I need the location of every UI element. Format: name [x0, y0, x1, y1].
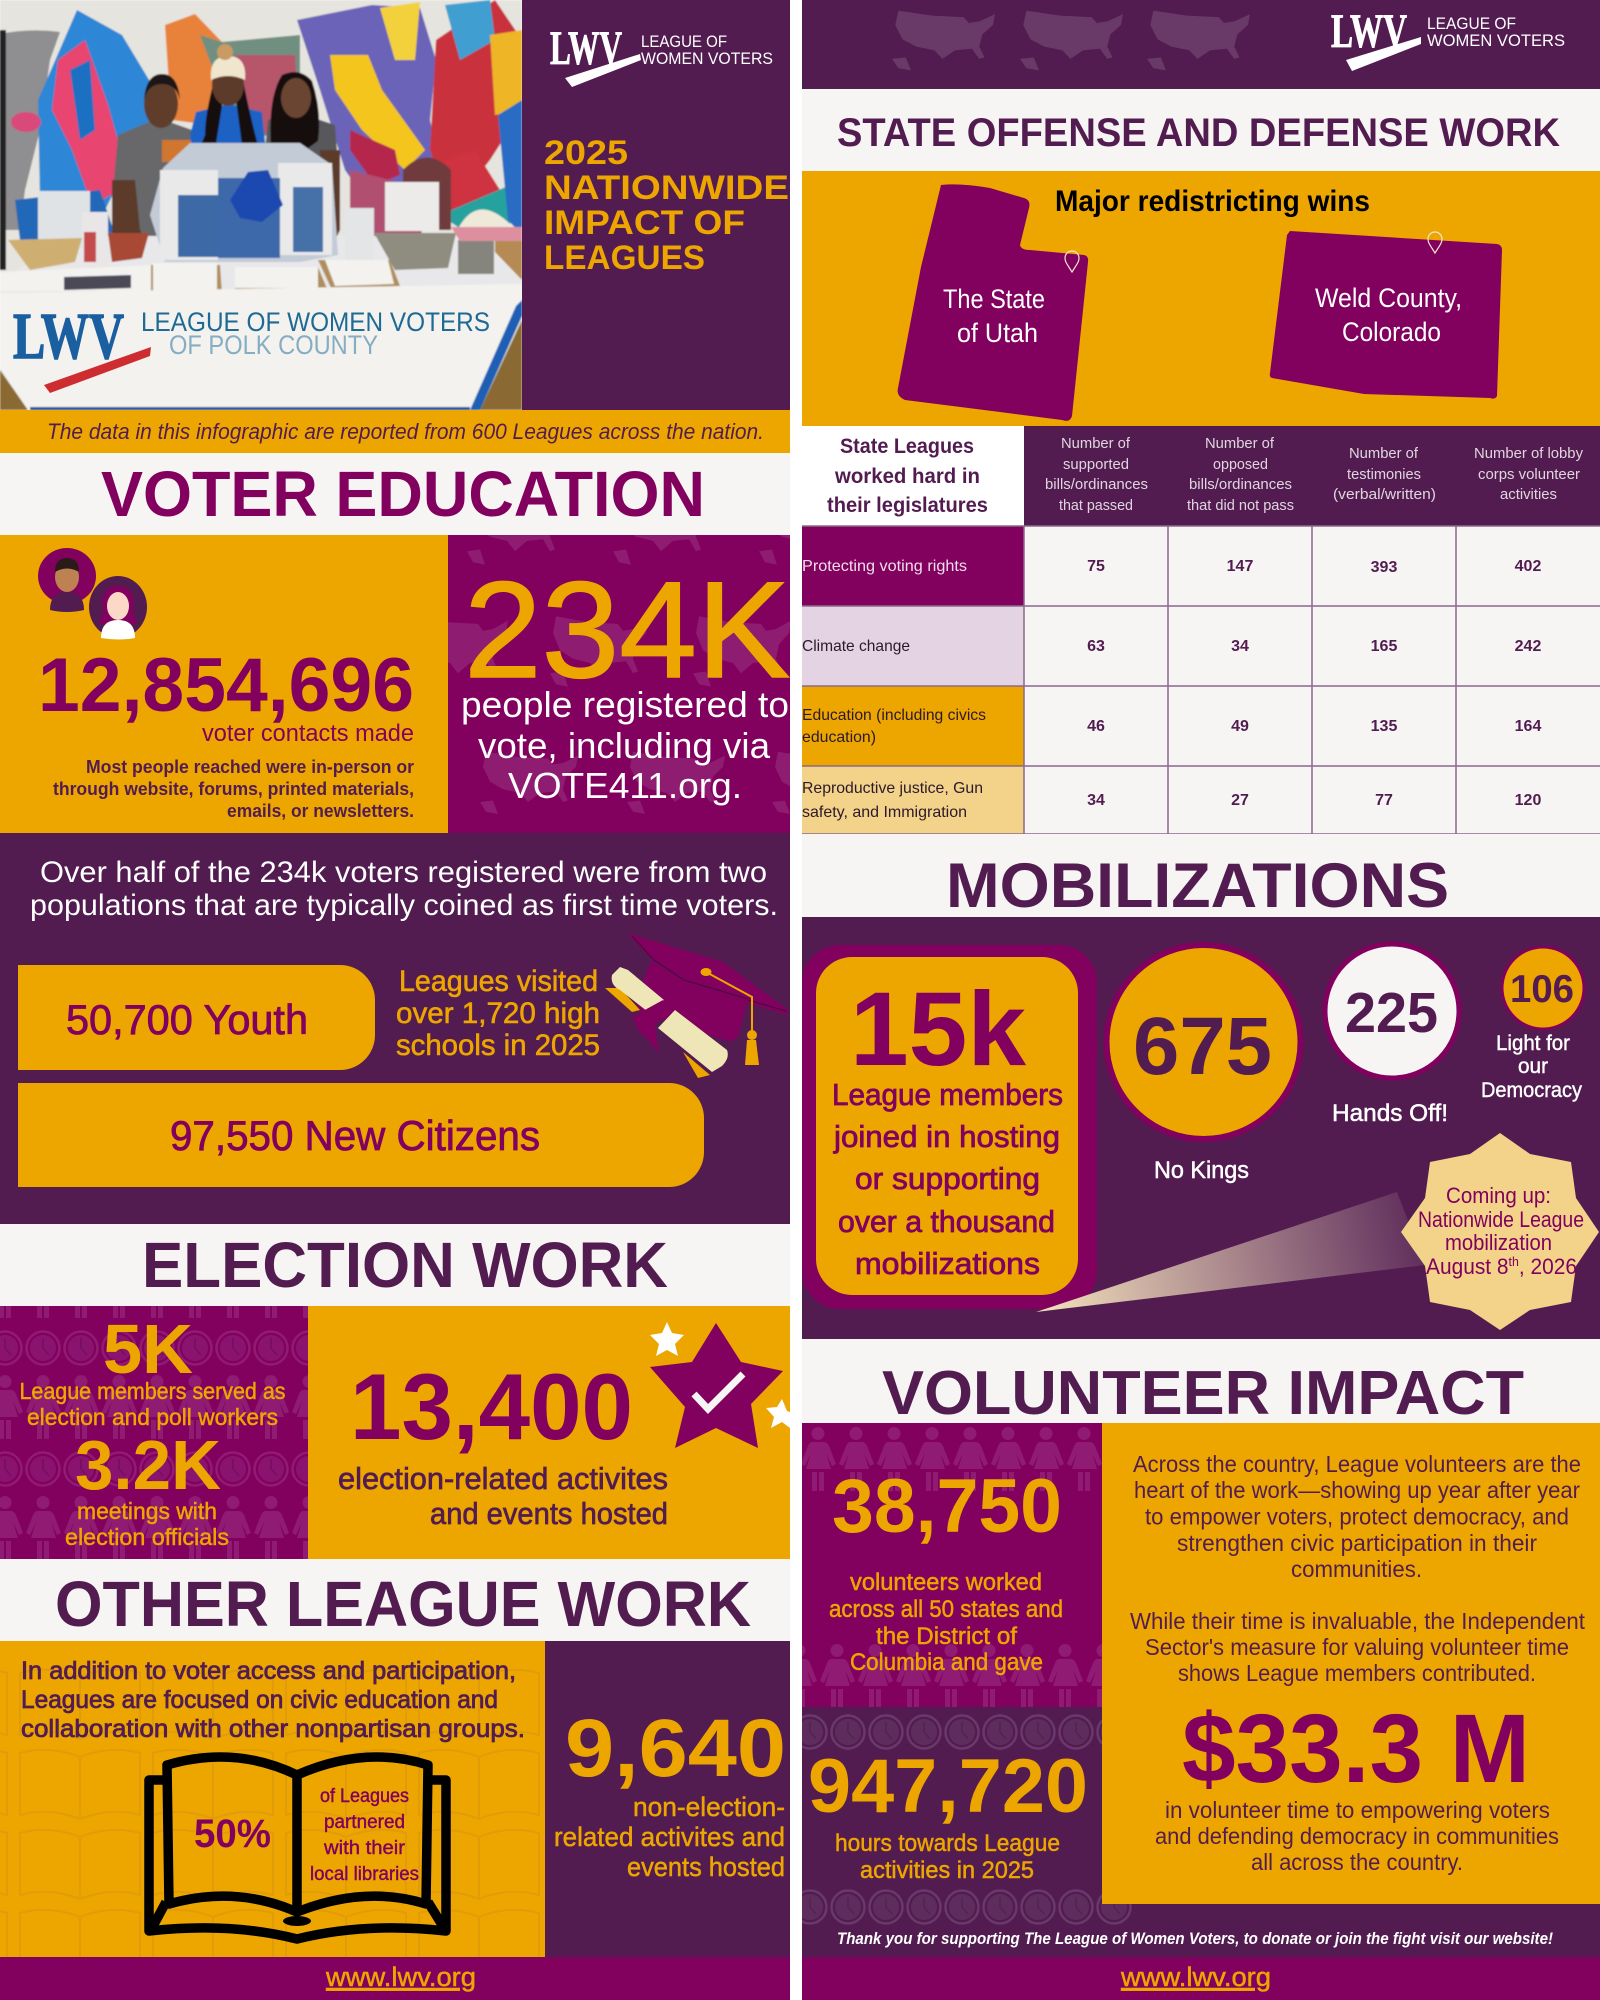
stat circle: No Kings: No Kings — [1154, 1157, 1249, 1184]
table values: 46 — [1087, 718, 1105, 735]
panel: voter contacts: 12,854,696 — [38, 643, 414, 728]
pill: new citizens — [18, 1083, 704, 1187]
data source strip — [0, 410, 790, 453]
heading: other league work: OTHER LEAGUE WORK — [55, 1568, 751, 1640]
photo: volunteers at a League table — [0, 0, 522, 410]
logo: LWV: LWV — [550, 22, 622, 75]
table values: 165 — [1371, 638, 1397, 655]
panel: volunteer value — [1102, 1423, 1600, 1904]
panel: election workers: election officials — [65, 1524, 229, 1550]
table column headers: that did not pass — [1187, 497, 1294, 514]
panel: election workers — [0, 1306, 308, 1559]
heading: volunteer impact — [802, 1339, 1600, 1428]
panel: election activities: 13,400 — [350, 1354, 633, 1459]
table row labels: safety, and Immigration — [802, 804, 967, 821]
callout: 15k members: 15k — [850, 971, 1027, 1088]
panel: election workers: 3.2K — [75, 1426, 221, 1504]
icon: open book with library statistic: partnered — [324, 1812, 405, 1833]
table values: 402 — [1515, 558, 1541, 575]
table column headers: Number of — [1205, 435, 1275, 452]
table values: 75 — [1087, 558, 1105, 575]
title text: LEAGUES — [544, 239, 705, 277]
panel: volunteers: volunteers worked — [850, 1569, 1042, 1596]
panel: volunteers: the District of — [876, 1623, 1017, 1650]
table row header title: worked hard in — [834, 465, 980, 488]
callout: 15k members: or supporting — [855, 1161, 1040, 1196]
panel: election activities — [308, 1306, 790, 1559]
table: state legislative work — [802, 426, 1600, 834]
footer: right website: www.lwv.org — [1120, 1962, 1271, 1992]
civic education text: In addition to voter access and participation, — [21, 1657, 516, 1685]
panel: non-election activities — [545, 1641, 790, 1957]
icon: open book with library statistic: with their — [323, 1838, 406, 1859]
stat circle: Light for our Democracy: 106 — [1510, 968, 1574, 1011]
arrow: beam toward coming up badge — [1036, 1192, 1425, 1312]
activities caption: and events hosted — [430, 1496, 668, 1531]
heading: election work — [0, 1224, 790, 1306]
panel: voter contacts: voter contacts made — [202, 720, 414, 747]
panel: redistricting wins: Major redistricting wins — [1055, 185, 1370, 218]
panel: election workers: meetings with — [77, 1498, 217, 1524]
logo: LWV: WOMEN VOTERS — [1427, 31, 1565, 50]
map: Utah: The State — [943, 284, 1045, 314]
table values: 164 — [1515, 718, 1541, 735]
stat circle: Light for our Democracy — [1481, 947, 1584, 1102]
heading: mobilizations — [802, 834, 1600, 921]
table row labels: Protecting voting rights — [802, 558, 967, 575]
high school visits text: over 1,720 high — [396, 997, 600, 1030]
callout: 15k members: League members — [832, 1077, 1063, 1112]
high school visits text — [396, 965, 600, 1062]
panel: election workers: 5K — [103, 1310, 193, 1388]
value caption: all across the country. — [1251, 1849, 1463, 1875]
people — [112, 118, 200, 260]
volunteer narrative text: strengthen civic participation in their — [1177, 1530, 1537, 1556]
panel: voter contacts — [0, 535, 448, 833]
table values: 34 — [1087, 792, 1105, 809]
badge: coming up: , 2026 — [1519, 1254, 1577, 1279]
map: Weld County — [1270, 231, 1502, 399]
registration text: VOTE411.org. — [508, 765, 742, 806]
registration text: people registered to — [461, 684, 789, 725]
heading: state offense and defense work — [802, 89, 1600, 171]
panel: mobilizations — [802, 917, 1600, 1339]
map: Weld County: Weld County, — [1315, 283, 1462, 313]
table column headers: Number of — [1349, 445, 1419, 462]
heading: volunteer impact: VOLUNTEER IMPACT — [882, 1359, 1524, 1428]
value caption: and defending democracy in communities — [1155, 1823, 1559, 1849]
high school visits text: schools in 2025 — [396, 1029, 600, 1062]
table values: 393 — [1371, 559, 1397, 576]
stat circle: Hands Off: Hands Off! — [1332, 1100, 1448, 1127]
high school visits text: Leagues visited — [399, 965, 598, 998]
title text: 2025 — [544, 134, 628, 172]
panel: volunteer hours — [802, 1707, 1102, 1904]
callout: 15k members — [802, 945, 1097, 1309]
table row labels: Education (including civics — [802, 707, 986, 724]
heading: voter education — [0, 453, 790, 536]
panel: volunteer hours: hours towards League — [835, 1830, 1060, 1857]
callout: 15k members: mobilizations — [855, 1246, 1040, 1281]
table row header title — [827, 435, 988, 517]
panel: volunteers: 38,750 — [832, 1464, 1062, 1549]
icon: two people — [38, 548, 147, 640]
table column headers: bills/ordinances — [1189, 476, 1292, 493]
footer: left website — [0, 1957, 790, 2000]
heading: voter education: VOTER EDUCATION — [101, 458, 705, 530]
registration text: vote, including via — [478, 725, 771, 766]
data source strip: The data in this infographic are reported from 600 Leagues across the nation. — [47, 419, 764, 444]
contact channels note: through website, forums, printed materials, — [53, 779, 414, 799]
table column headers: testimonies — [1347, 466, 1421, 483]
civic education text: Leagues are focused on civic education and — [21, 1686, 498, 1714]
table values: 147 — [1227, 558, 1253, 575]
map: Weld County: Colorado — [1342, 317, 1441, 347]
photo: volunteers at a League table: OF POLK COUNTY — [169, 330, 378, 360]
table column headers: Number of — [1061, 435, 1131, 452]
icon: star with check — [650, 1322, 790, 1448]
header band with maps and logo — [802, 0, 1600, 89]
floor and banner — [0, 320, 522, 410]
pill: youth: 50,700 Youth — [66, 996, 308, 1043]
icon: graduation cap and diploma — [605, 933, 788, 1078]
icon: open book with library statistic — [149, 1757, 446, 1939]
table values: 49 — [1231, 718, 1249, 735]
intro text: Over half of the 234k voters registered were from two — [40, 856, 767, 889]
pill: youth — [18, 965, 375, 1070]
volunteer narrative text: shows League members contributed. — [1178, 1660, 1536, 1686]
icon: open book with library statistic: 50% — [194, 1812, 271, 1856]
panel: election workers: League members served as — [20, 1378, 286, 1404]
logo: LWV: LEAGUE OF — [641, 32, 727, 51]
contact channels note — [53, 757, 414, 821]
badge: coming up: th — [1509, 1254, 1519, 1269]
cellophane gift — [150, 143, 338, 262]
stat circle: Hands Off — [1325, 944, 1459, 1127]
volunteer narrative text: Across the country, League volunteers are the — [1133, 1451, 1581, 1477]
logo: LWV — [1331, 5, 1565, 71]
stat circle: Hands Off: 225 — [1345, 981, 1438, 1045]
heading: mobilizations: MOBILIZATIONS — [946, 851, 1449, 921]
table column headers: Number of lobby — [1474, 445, 1583, 462]
table column headers: that passed — [1059, 497, 1133, 514]
panel: non-election activities: events hosted — [627, 1852, 785, 1882]
photo: volunteers at a League table: LWV — [13, 300, 124, 373]
table values: 77 — [1375, 792, 1393, 809]
panel: civic education — [0, 1641, 545, 1957]
table values: 135 — [1371, 718, 1397, 735]
heading: state offense and defense work: STATE OFFENSE AND DEFENSE WORK — [837, 111, 1560, 155]
logo: LWV — [550, 22, 773, 87]
volunteer narrative text: Sector's measure for valuing volunteer time — [1145, 1634, 1569, 1660]
table column headers: (verbal/written) — [1333, 486, 1436, 503]
stat circle: No Kings — [1106, 945, 1300, 1184]
volunteer narrative text: While their time is invaluable, the Independent — [1130, 1608, 1586, 1634]
panel: volunteer value: $33.3 M — [1182, 1694, 1530, 1803]
volunteer narrative text: communities. — [1291, 1556, 1422, 1582]
value caption: in volunteer time to empowering voters — [1165, 1797, 1550, 1823]
value caption — [1155, 1797, 1559, 1875]
activities caption: election-related activites — [338, 1461, 668, 1496]
photo: volunteers at a League table: LEAGUE OF WOMEN VOTERS — [141, 307, 490, 337]
callout: 15k members: over a thousand — [838, 1204, 1055, 1239]
contact channels note: emails, or newsletters. — [227, 801, 414, 821]
table column headers — [1045, 435, 1583, 514]
stat circle: No Kings: 675 — [1133, 1001, 1272, 1092]
title text: IMPACT OF — [544, 204, 745, 242]
panel: title — [522, 0, 790, 410]
panel: volunteers: across all 50 states and — [829, 1596, 1063, 1623]
pill: new citizens: 97,550 New Citizens — [170, 1112, 540, 1159]
map: Utah: of Utah — [957, 318, 1038, 348]
thank you strip — [802, 1904, 1600, 1957]
map: Utah — [898, 184, 1088, 421]
table row labels: Climate change — [802, 638, 910, 655]
panel: non-election activities: related activites and — [554, 1822, 785, 1852]
table column headers: bills/ordinances — [1045, 476, 1148, 493]
intro text — [30, 856, 778, 922]
title text — [544, 134, 789, 277]
table column headers: corps volunteer — [1478, 466, 1580, 483]
badge: coming up: mobilization — [1445, 1230, 1552, 1255]
civic education text: collaboration with other nonpartisan groups. — [21, 1715, 525, 1743]
table row labels: education) — [802, 729, 876, 746]
panel: redistricting wins — [802, 171, 1600, 426]
logo: LWV: LWV — [1331, 5, 1407, 58]
badge: coming up — [1401, 1133, 1599, 1330]
title text: NATIONWIDE — [544, 169, 789, 207]
panel: volunteers — [802, 1423, 1102, 1707]
icon: open book with library statistic: of Leagues — [320, 1786, 409, 1807]
volunteer narrative text: to empower voters, protect democracy, and — [1145, 1504, 1569, 1530]
callout: 15k members: joined in hosting — [833, 1119, 1060, 1154]
panel: people registered: 234K — [464, 554, 790, 707]
panel: people registered — [410, 494, 870, 833]
panel: volunteer hours: 947,720 — [808, 1744, 1088, 1829]
panel: volunteer hours: activities in 2025 — [860, 1857, 1034, 1884]
table column headers: supported — [1063, 456, 1129, 473]
icon: faint US maps — [892, 11, 1250, 70]
table row header title: their legislatures — [827, 494, 988, 517]
intro text: populations that are typically coined as first time voters. — [30, 889, 778, 922]
table row labels: Reproductive justice, Gun — [802, 780, 983, 797]
volunteer narrative text — [1130, 1451, 1586, 1686]
table values: 27 — [1231, 792, 1249, 809]
badge: coming up: August 8 — [1426, 1254, 1513, 1279]
heading: election work: ELECTION WORK — [142, 1229, 668, 1301]
table column headers: activities — [1500, 486, 1557, 503]
table items — [38, 191, 90, 248]
stat circle: Light for our Democracy: Light for — [1496, 1032, 1570, 1055]
table values: 63 — [1087, 638, 1105, 655]
panel: volunteers: Columbia and gave — [850, 1649, 1043, 1676]
stat circle: Light for our Democracy: Democracy — [1481, 1079, 1582, 1102]
logo: LWV: LEAGUE OF — [1427, 14, 1516, 33]
footer: right website — [802, 1957, 1600, 2000]
table values: 34 — [1231, 638, 1249, 655]
table values: 242 — [1515, 638, 1541, 655]
table row header title: State Leagues — [840, 435, 974, 458]
table values: 120 — [1515, 792, 1541, 809]
badge: coming up: Coming up: — [1446, 1183, 1551, 1208]
table column headers: opposed — [1213, 456, 1268, 473]
panel: non-election activities: non-election- — [633, 1792, 785, 1822]
civic education text — [21, 1657, 525, 1743]
volunteer narrative text: heart of the work—showing up year after year — [1134, 1477, 1580, 1503]
stat circle: Light for our Democracy: our — [1518, 1055, 1548, 1078]
panel: first time voters — [0, 833, 790, 1224]
panel: election workers: election and poll workers — [27, 1404, 278, 1430]
icon: open book with library statistic: local libraries — [310, 1864, 419, 1885]
registration text — [461, 684, 789, 806]
panel: non-election activities: 9,640 — [565, 1703, 786, 1794]
table values — [1087, 558, 1541, 809]
table top — [0, 236, 522, 300]
activities caption — [338, 1461, 668, 1531]
logo: LWV: WOMEN VOTERS — [641, 49, 773, 68]
contact channels note: Most people reached were in-person or — [86, 757, 414, 777]
table row labels — [802, 558, 986, 821]
footer: left website: www.lwv.org — [325, 1962, 476, 1992]
